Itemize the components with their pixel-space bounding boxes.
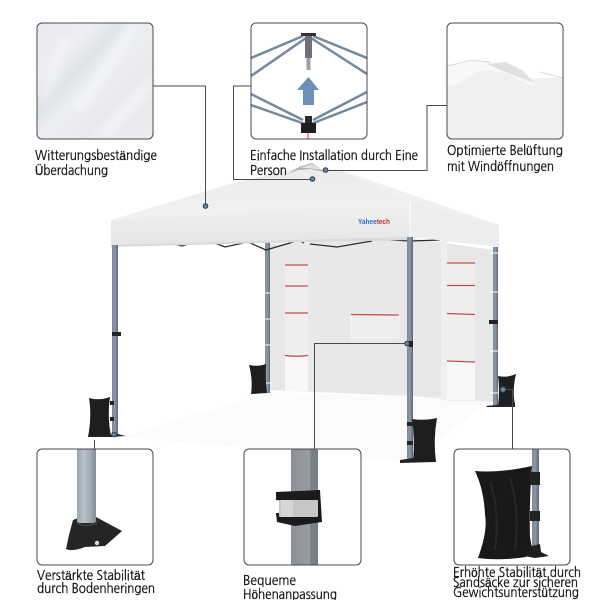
text: easy installation: Einfache Installation durch Eine [250, 149, 418, 162]
panel: weatherproof fabric [37, 23, 153, 139]
text: easy installation: Person [250, 164, 287, 177]
left front pole [112, 245, 126, 437]
text: easy installation [250, 149, 418, 177]
sandbag [475, 466, 532, 559]
panel: height adjustment [244, 449, 361, 565]
front sandbag [407, 418, 437, 462]
text: ventilation: mit Windöffnungen [447, 160, 554, 173]
frame struts [251, 36, 367, 124]
front valance [111, 202, 410, 245]
text: height adjustment [243, 574, 337, 600]
text: sandbags: Sandsäcke zur sicheren [453, 576, 578, 589]
text: ground pegs: durch Bodenheringen [37, 582, 155, 595]
panel: sandbags [454, 449, 570, 565]
panel: ventilation [447, 23, 563, 139]
text: weatherproof: Überdachung [35, 164, 108, 177]
top hub [301, 33, 316, 70]
base plate [66, 517, 122, 550]
text: sandbags [453, 566, 581, 599]
panel: easy installation [251, 23, 367, 139]
centre window [351, 314, 399, 338]
height clip [276, 490, 322, 526]
right wall pockets [447, 263, 475, 401]
right pole [489, 247, 498, 405]
scissor truss [170, 239, 440, 250]
text: sandbags: Erhöhte Stabilität durch [453, 566, 581, 579]
bottom hub [301, 116, 316, 139]
text: ground pegs: Verstärkte Stabilität [37, 569, 145, 582]
side wall [410, 238, 494, 402]
connector dots [112, 168, 506, 437]
left sandbag [88, 397, 114, 437]
text: weatherproof [35, 149, 157, 177]
roof vent [288, 163, 325, 174]
text: height adjustment: Bequeme [243, 574, 296, 587]
back left pole [265, 241, 272, 393]
text: ventilation [447, 144, 563, 173]
icon: up arrow [297, 77, 319, 105]
ground shadow [122, 392, 490, 462]
left wall pockets [285, 265, 308, 391]
logo: Yaheetech [358, 219, 390, 226]
front centre pole [400, 237, 435, 463]
right sandbag [486, 374, 516, 407]
text: ventilation: Optimierte Belüftung [447, 144, 563, 157]
text: sandbags: Gewichtsunterstützung [453, 586, 579, 599]
roof top [111, 168, 410, 220]
text: weatherproof: Witterungsbeständige [35, 149, 157, 162]
text: ground pegs [37, 569, 155, 595]
back wall [268, 238, 410, 396]
back left sandbag [249, 364, 267, 394]
connector lines [94, 86, 512, 449]
canopy tent [88, 163, 516, 463]
panel: ground pegs [37, 449, 153, 565]
